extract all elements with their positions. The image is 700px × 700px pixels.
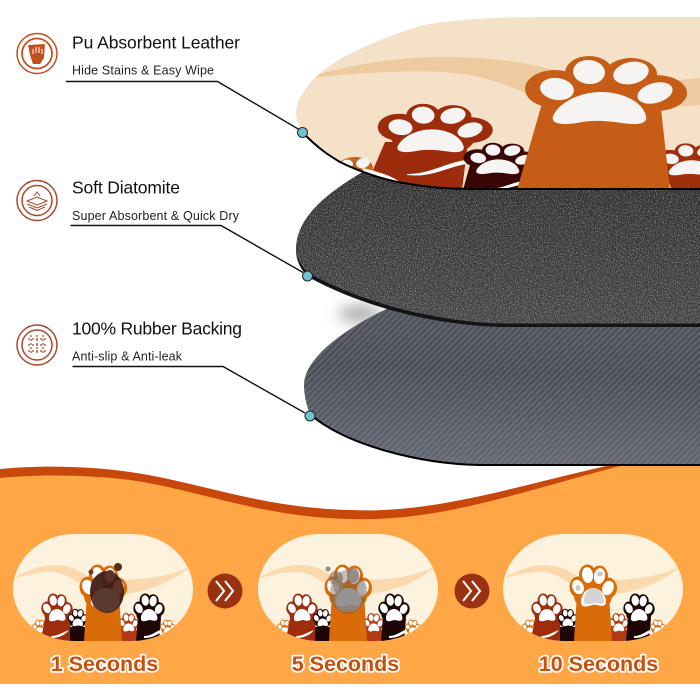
diatomite grain — [296, 165, 700, 324]
dark paw — [464, 142, 528, 188]
subheading: Hide Stains & Easy Wipe — [72, 64, 214, 78]
item: soft diatomite — [17, 178, 312, 281]
item: PU absorbent leather — [17, 32, 308, 138]
wave red edge — [0, 466, 700, 684]
icon: hand wiping — [17, 34, 57, 74]
rubber mat stripes — [304, 305, 700, 465]
icon: grip grid — [17, 325, 57, 365]
marker dot — [298, 128, 308, 138]
marker dot — [302, 271, 312, 281]
residual gray marks — [576, 572, 604, 605]
leather mat base — [296, 17, 700, 189]
leader line — [70, 226, 303, 272]
item: rubber backing — [17, 318, 315, 421]
marker dot — [305, 411, 315, 421]
heading: Pu Absorbent Leather — [72, 32, 240, 52]
subheading: Super Absorbent & Quick Dry — [72, 209, 240, 223]
big orange paw — [517, 56, 687, 190]
label: 1 Seconds: 1 Seconds — [51, 652, 158, 676]
soft shadow under diatomite layer — [338, 305, 382, 323]
panel: 10 seconds clean — [503, 534, 683, 641]
leader line — [72, 366, 305, 413]
tan wave — [312, 57, 700, 108]
mat scene — [503, 534, 683, 641]
mat scene — [258, 534, 438, 641]
panel: diatomite layer — [296, 165, 700, 327]
dark stain — [88, 563, 124, 613]
icon: layers — [17, 180, 57, 220]
right red paw — [666, 143, 700, 188]
panel: rubber backing layer — [304, 305, 700, 465]
fading stain — [326, 566, 367, 614]
panel: 5 seconds stain — [258, 534, 438, 641]
diatomite surface — [296, 165, 700, 324]
rubber mat surface — [304, 305, 700, 465]
rubber mat lower edge — [310, 414, 700, 465]
subheading: Anti-slip & Anti-leak — [72, 350, 183, 364]
panel: PU leather top layer — [296, 17, 700, 190]
orange footer band — [0, 466, 700, 684]
diatomite edge — [296, 165, 700, 327]
label: 5 Seconds: 5 Seconds — [292, 652, 399, 676]
mat artwork — [312, 56, 700, 190]
footer fill — [0, 466, 700, 684]
heading: 100% Rubber Backing — [72, 318, 242, 338]
mat scene — [13, 534, 193, 641]
leader line — [66, 82, 299, 130]
red paw — [362, 104, 493, 190]
panel: 1 second stain — [13, 534, 193, 641]
arrow 1 — [208, 574, 242, 608]
small orange paw — [340, 157, 373, 172]
label: 10 Seconds: 10 Seconds — [539, 652, 658, 676]
heading: Soft Diatomite — [72, 178, 180, 198]
leather mat lower edge — [303, 133, 700, 189]
arrow 2 — [454, 574, 490, 608]
